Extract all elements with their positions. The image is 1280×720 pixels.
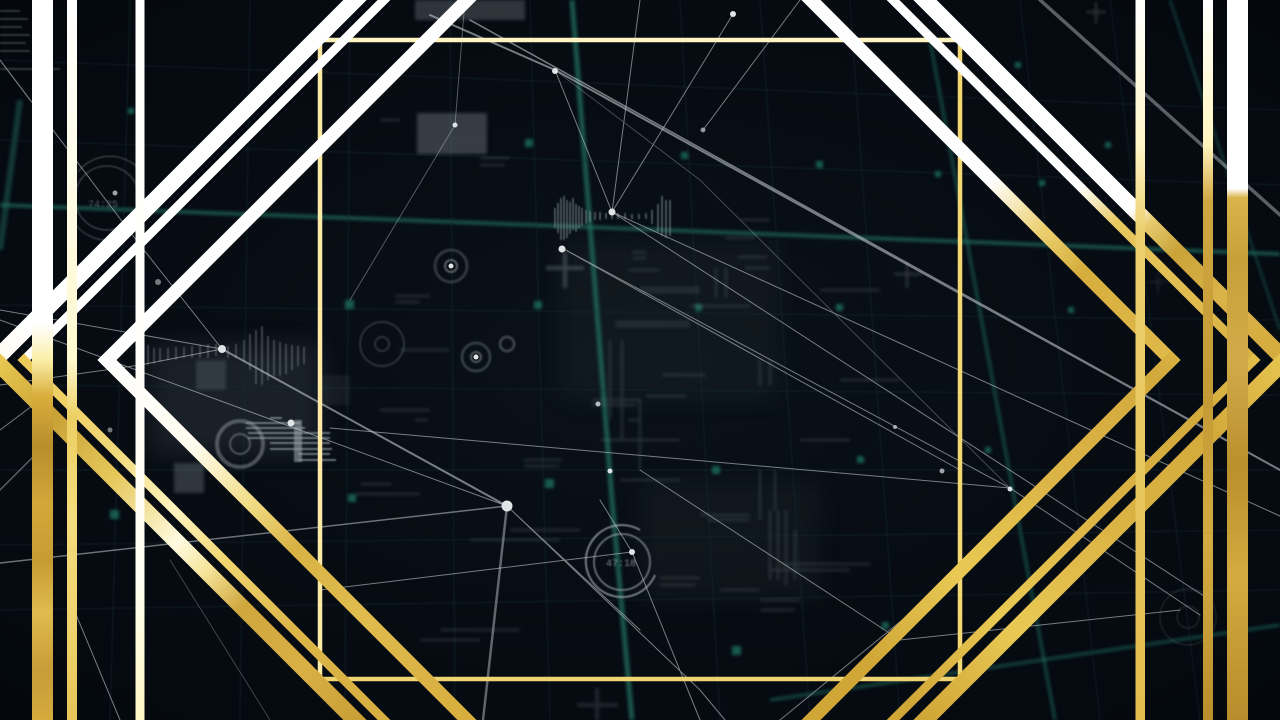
waveform: center: [555, 196, 670, 240]
square bottom edge: [318, 677, 962, 681]
waveform: left: [148, 326, 304, 385]
HUD panels blurred: [174, 0, 525, 493]
crosses: [546, 2, 1168, 720]
HUD data blocks: [148, 196, 670, 462]
ring: upper left timer: [75, 156, 140, 240]
target rings: [75, 156, 1216, 645]
ring: lower left: [217, 421, 263, 467]
gold frame: inner square: [318, 40, 962, 680]
ring: tiny center: [500, 337, 514, 351]
HUD dashes: [355, 120, 900, 640]
square left edge: [318, 40, 322, 680]
ring: small center: [462, 343, 490, 371]
corner data readout: [0, 10, 60, 70]
waveform: lower left bars: [246, 418, 336, 460]
gold frame: left vertical bars: [32, 0, 144, 720]
square top edge: [318, 38, 962, 42]
ring: lower center timer: [586, 525, 655, 597]
ring: mid: [435, 250, 467, 282]
network nodes: [108, 11, 1012, 555]
ring: upper left timer: 74:25: [88, 200, 118, 211]
ring: lower right: [1160, 589, 1216, 645]
grid node dots: [110, 62, 1111, 655]
ring: lower center timer: 47:18: [606, 559, 636, 570]
ring: small left: [360, 322, 404, 366]
soft grey haze behind data: [150, 240, 820, 600]
gold frame: right vertical bars: [1136, 0, 1248, 720]
square right edge: [958, 40, 962, 680]
